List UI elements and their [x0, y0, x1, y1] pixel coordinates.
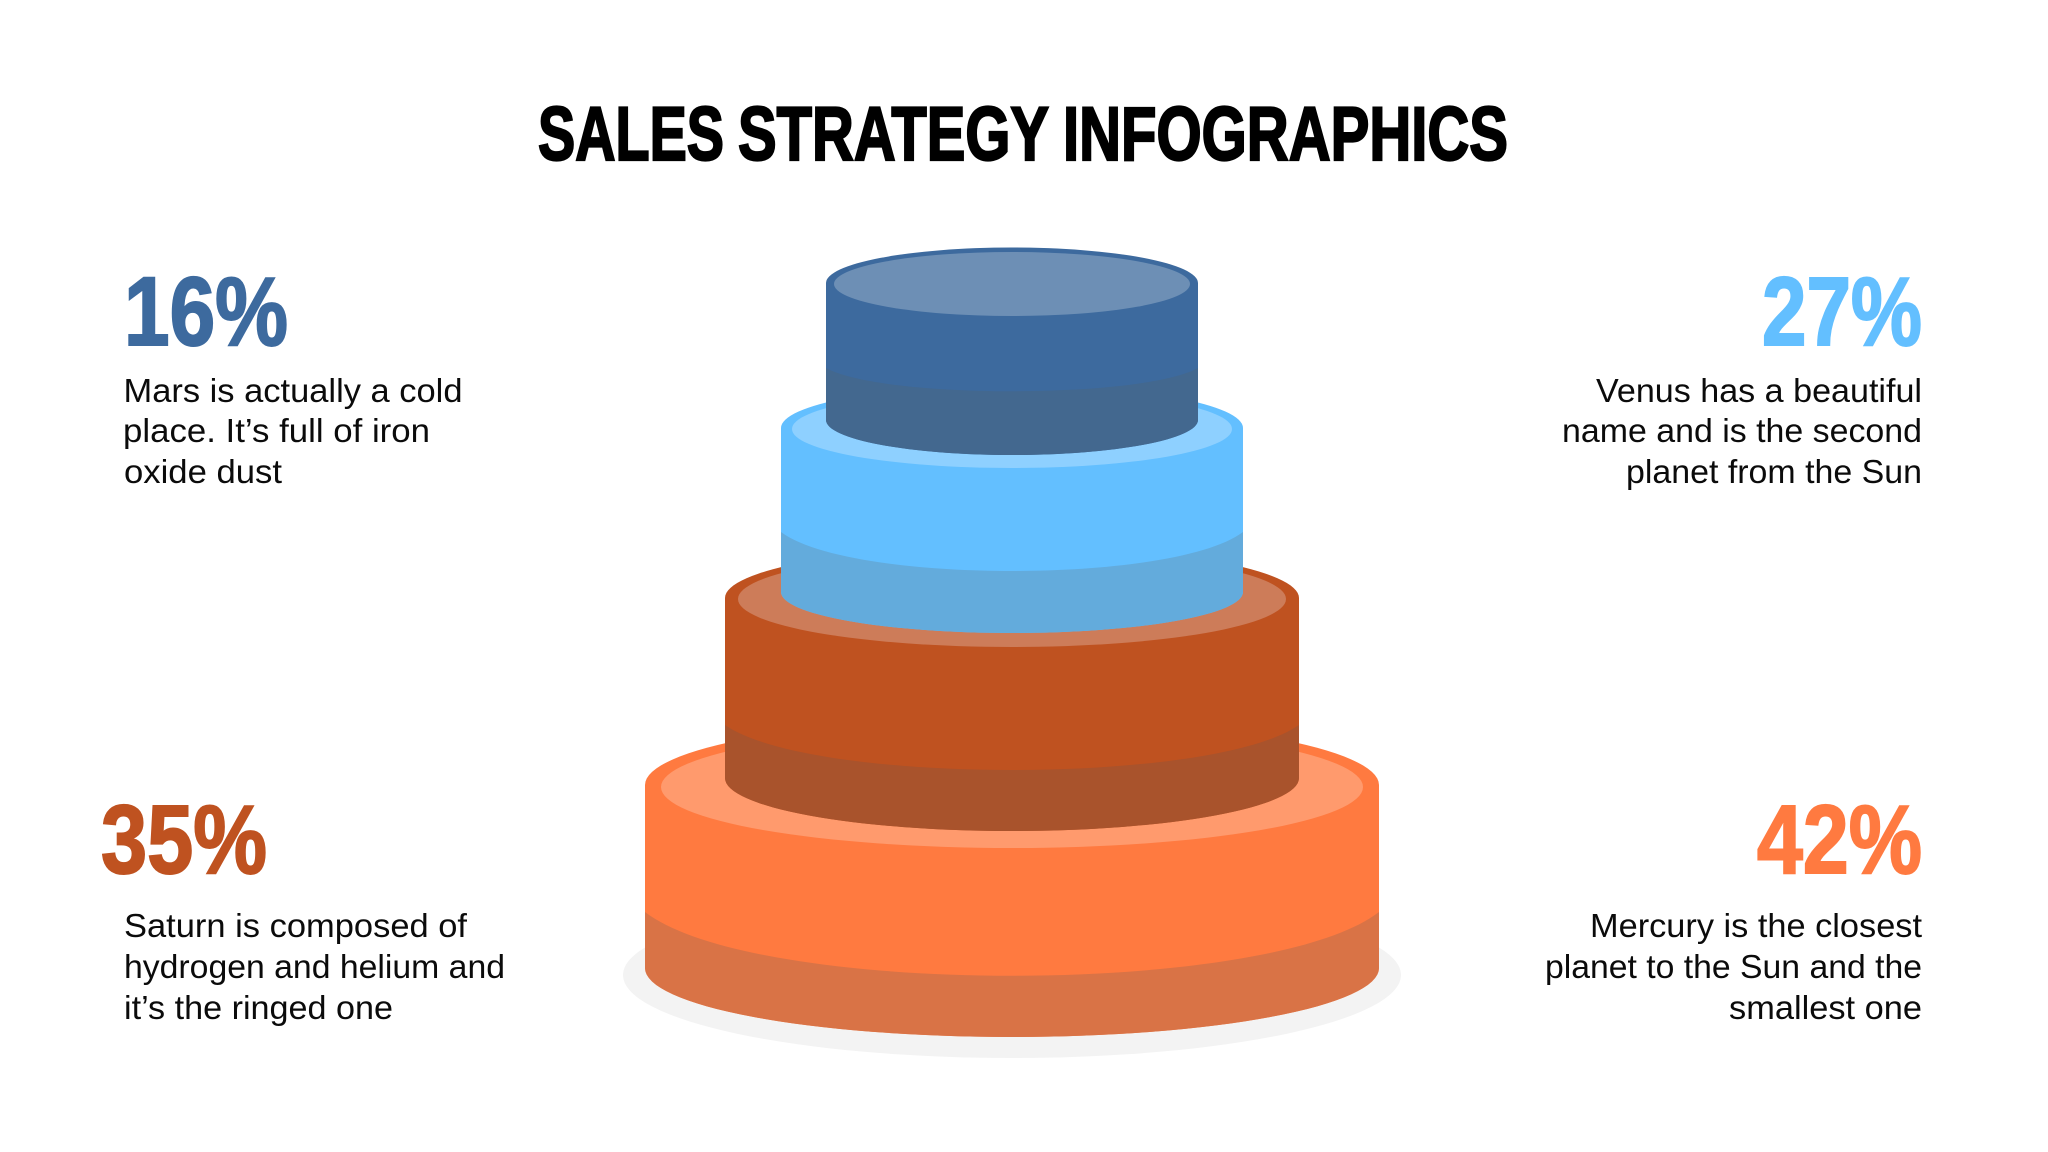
percentage 42%: 42% — [1757, 785, 1922, 894]
tier: light blue (27%) — [781, 385, 1243, 633]
description Venus: name and is the second — [1562, 412, 1922, 449]
percentage 35%: 35% — [101, 785, 267, 894]
description Mars: Mars is actually a cold — [124, 372, 462, 409]
stat: 27% Venus — [1562, 257, 1922, 490]
description Venus — [1562, 372, 1922, 490]
description Saturn: hydrogen and helium and — [124, 948, 505, 985]
title: STRATEGY — [738, 92, 1049, 177]
tier: brown (35%) — [725, 546, 1299, 831]
description Mercury — [1545, 907, 1922, 1026]
ground shadow — [623, 892, 1401, 1058]
description Saturn: Saturn is composed of — [124, 907, 468, 944]
stacked cylinder chart — [623, 248, 1401, 1058]
percentage 16%: 16% — [124, 257, 288, 366]
description Saturn — [124, 907, 505, 1026]
title: SALES — [538, 92, 724, 177]
stat: 42% Mercury — [1545, 785, 1922, 1026]
description Mercury: planet to the Sun and the — [1545, 948, 1922, 985]
description Mercury: Mercury is the closest — [1590, 907, 1922, 944]
description Saturn: it’s the ringed one — [124, 989, 393, 1026]
description Mars — [123, 372, 462, 490]
percentage 27%: 27% — [1762, 257, 1922, 366]
tier: orange base (42%) — [645, 718, 1379, 1037]
description Venus: Venus has a beautiful — [1596, 372, 1922, 409]
tier: dark blue (16%) — [826, 248, 1198, 455]
description Venus: planet from the Sun — [1626, 453, 1922, 490]
title: INFOGRAPHICS — [1063, 92, 1508, 177]
stat: 16% Mars — [123, 257, 462, 490]
stat: 35% Saturn — [101, 785, 505, 1026]
description Mercury: smallest one — [1729, 989, 1922, 1026]
description Mars: place. It’s full of iron — [123, 412, 430, 449]
title — [538, 92, 1508, 177]
description Mars: oxide dust — [124, 453, 282, 490]
